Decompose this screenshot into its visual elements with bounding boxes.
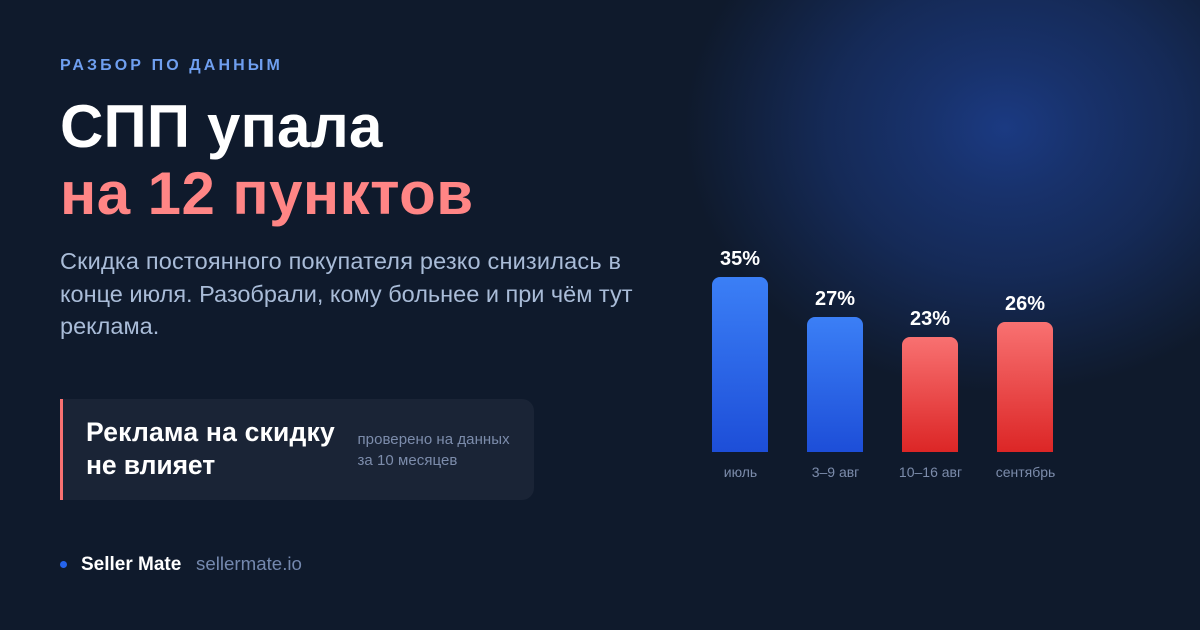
subtitle text: реклама. bbox=[60, 313, 159, 339]
bar: июль: 35% bbox=[720, 248, 760, 270]
bar chart bbox=[712, 248, 1055, 480]
subtitle text: конце июля. Разобрали, кому больнее и при чём тут bbox=[60, 280, 632, 306]
bar: 3–9 авг bbox=[807, 288, 863, 480]
callout headline bbox=[86, 417, 335, 480]
subtitle text bbox=[60, 248, 632, 339]
callout card bbox=[60, 399, 534, 500]
bar: сентябрь bbox=[996, 293, 1055, 480]
bar: сентябрь: сентябрь bbox=[996, 464, 1055, 480]
title: СПП упала bbox=[60, 93, 383, 160]
bar: 10–16 авг: 10–16 авг bbox=[899, 464, 962, 480]
callout note: за 10 месяцев bbox=[358, 452, 457, 469]
subtitle text: Скидка постоянного покупателя резко снизилась в bbox=[60, 248, 621, 274]
footer brand bbox=[60, 553, 302, 575]
bar: 10–16 авг bbox=[899, 308, 962, 480]
callout headline: не влияет bbox=[86, 450, 215, 480]
brand name: Seller Mate bbox=[81, 554, 181, 575]
bar: 3–9 авг: 3–9 авг bbox=[812, 464, 859, 480]
bar: июль bbox=[712, 248, 768, 480]
eyebrow label: РАЗБОР ПО ДАННЫМ bbox=[60, 57, 283, 74]
callout headline: Реклама на скидку bbox=[86, 417, 335, 447]
title bbox=[60, 93, 474, 226]
callout note bbox=[358, 431, 510, 469]
bar: сентябрь: 26% bbox=[1005, 293, 1045, 315]
title: на 12 пунктов bbox=[60, 160, 474, 226]
bar: 3–9 авг: 27% bbox=[815, 288, 855, 310]
bar: июль: июль bbox=[724, 464, 757, 480]
icon: brand dot bbox=[60, 561, 67, 568]
callout note: проверено на данных bbox=[358, 431, 510, 448]
brand url: sellermate.io bbox=[196, 553, 302, 574]
bar: 10–16 авг: 23% bbox=[910, 308, 950, 330]
